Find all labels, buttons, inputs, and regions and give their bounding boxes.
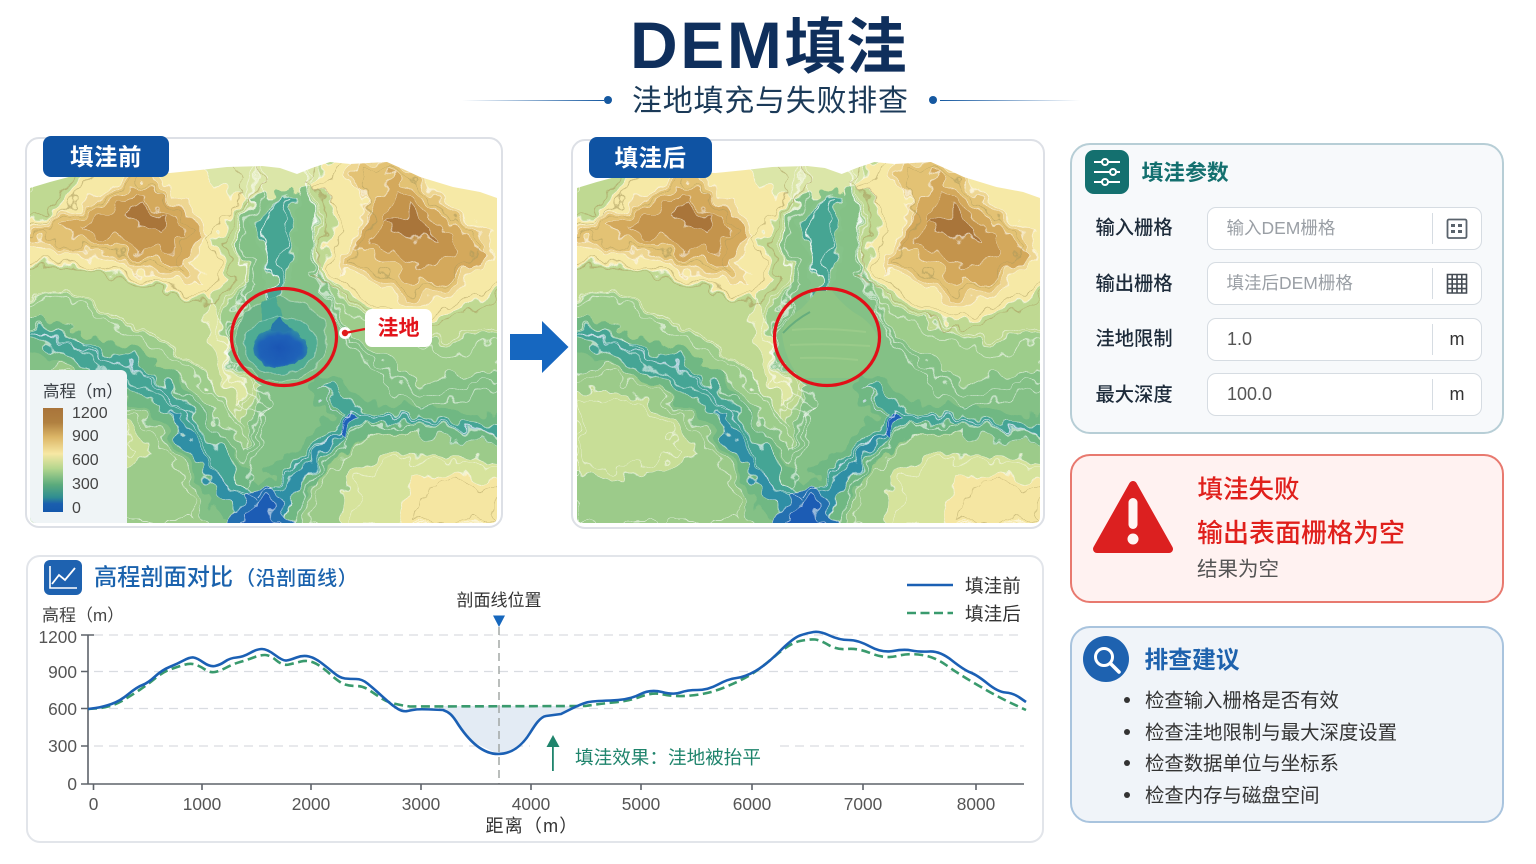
y axis labels: 0: [67, 774, 77, 794]
y axis labels: 300: [48, 736, 77, 756]
legend labels: 600: [72, 452, 99, 469]
x axis labels: 0: [89, 794, 98, 814]
section line: [498, 627, 500, 784]
row: max depth field: [1206, 373, 1482, 416]
x axis labels: 4000: [512, 794, 550, 814]
row: depression limit label: 洼地限制: [1096, 329, 1173, 350]
row: depression limit field: [1206, 318, 1482, 361]
arrow: before to after: [510, 321, 568, 373]
x axis labels: 8000: [957, 794, 995, 814]
alert heading: 填洼失败: [1198, 476, 1300, 504]
unit: m: [1450, 384, 1464, 404]
line: before fill: [88, 632, 1026, 754]
legend color ramp: [43, 408, 63, 512]
panel: failure alert: [1070, 454, 1504, 602]
label: before fill: [43, 136, 169, 177]
y axis labels: [39, 627, 77, 794]
icon: magnifier: [1083, 636, 1129, 682]
heading: elevation profile: 高程剖面对比（沿剖面线）: [94, 564, 358, 590]
row: output raster label: 输出栅格: [1096, 274, 1173, 294]
x axis labels: 3000: [402, 794, 440, 814]
tip 2: 检查洼地限制与最大深度设置: [1145, 722, 1397, 744]
row: output raster field: [1206, 262, 1482, 305]
depression in terrain: [235, 298, 327, 382]
section label: 剖面线位置: [456, 591, 542, 610]
legend: lines: [907, 576, 1021, 624]
legend: lines: 填洼后: [965, 604, 1021, 624]
x axis title: 距离（m）: [486, 816, 578, 836]
red circle: depression: [232, 288, 336, 386]
row: max depth label: 最大深度: [1096, 384, 1173, 406]
icon: warning: [1093, 481, 1173, 553]
x axis labels: 6000: [733, 794, 771, 814]
value: 100.0: [1227, 384, 1272, 404]
axes: [81, 635, 1024, 790]
subtitle decoration: left rule: [462, 95, 613, 105]
filled depression: [782, 291, 878, 378]
label: after fill: 填洼后: [614, 145, 686, 171]
unit: m: [1450, 329, 1464, 349]
legend labels: 300: [72, 476, 99, 493]
icon: line chart: [44, 560, 82, 595]
legend labels: [72, 405, 108, 517]
heading: fill parameters: 填洼参数: [1142, 160, 1229, 184]
fill area: depression: [443, 706, 581, 754]
map: terrain after fill: [577, 162, 1040, 523]
callout: depression: 洼地: [378, 317, 420, 340]
placeholder: 输入DEM栅格: [1226, 218, 1335, 238]
arrow: fill effect: [546, 735, 560, 771]
legend: elevation: [30, 370, 127, 523]
y axis labels: 900: [48, 662, 77, 682]
x axis labels: 7000: [844, 794, 882, 814]
label: before fill: 填洼前: [70, 144, 142, 170]
red circle: filled area: [774, 288, 880, 386]
y axis labels: 600: [48, 699, 77, 719]
icon: sliders: [1085, 150, 1129, 194]
panel: fill parameters: [1070, 142, 1504, 434]
label: after fill: [589, 137, 712, 178]
callout: depression: [365, 309, 432, 347]
panel: before fill map: [25, 137, 503, 528]
legend labels: 1200: [72, 405, 108, 422]
value: 1.0: [1227, 329, 1252, 349]
chart: elevation profile: [39, 576, 1027, 836]
legend labels: 900: [72, 428, 99, 445]
x axis labels: [89, 794, 995, 814]
y axis title: 高程（m）: [42, 606, 124, 625]
legend: lines: 填洼前: [965, 576, 1021, 596]
x axis labels: 2000: [292, 794, 330, 814]
tip 4: 检查内存与磁盘空间: [1145, 785, 1320, 807]
row: input raster field: [1206, 207, 1482, 250]
tip 1: 检查输入栅格是否有效: [1145, 690, 1339, 712]
legend title: 高程（m）: [43, 383, 123, 401]
alert message: 输出表面栅格为空: [1197, 518, 1405, 548]
annotation: fill effect: 填洼效果：洼地被抬平: [575, 747, 761, 768]
alert detail: 结果为空: [1197, 558, 1279, 580]
line: after fill: [88, 639, 1026, 710]
map: terrain before fill: [30, 162, 497, 523]
row: input raster label: 输入栅格: [1096, 218, 1173, 239]
leader line: [339, 327, 365, 339]
icon: grid: [1446, 274, 1468, 294]
x axis labels: 5000: [622, 794, 660, 814]
panel: troubleshooting: [1070, 626, 1504, 822]
placeholder: 填洼后DEM栅格: [1226, 272, 1353, 292]
legend labels: 0: [72, 500, 81, 517]
panel: after fill map: [571, 139, 1045, 529]
panel: elevation profile: [26, 555, 1044, 843]
tip 3: 检查数据单位与坐标系: [1145, 753, 1339, 775]
icon: table: [1446, 218, 1468, 239]
tip list: [1124, 690, 1397, 807]
heading: troubleshooting: 排查建议: [1144, 647, 1240, 674]
section marker: [493, 616, 505, 627]
subtitle decoration: right rule: [929, 95, 1080, 105]
y axis labels: 1200: [39, 627, 77, 647]
x axis labels: 1000: [183, 794, 221, 814]
title: DEM填洼: [630, 8, 907, 82]
grid lines: [94, 635, 1024, 746]
subtitle: 洼地填充与失败排查: [632, 85, 909, 118]
